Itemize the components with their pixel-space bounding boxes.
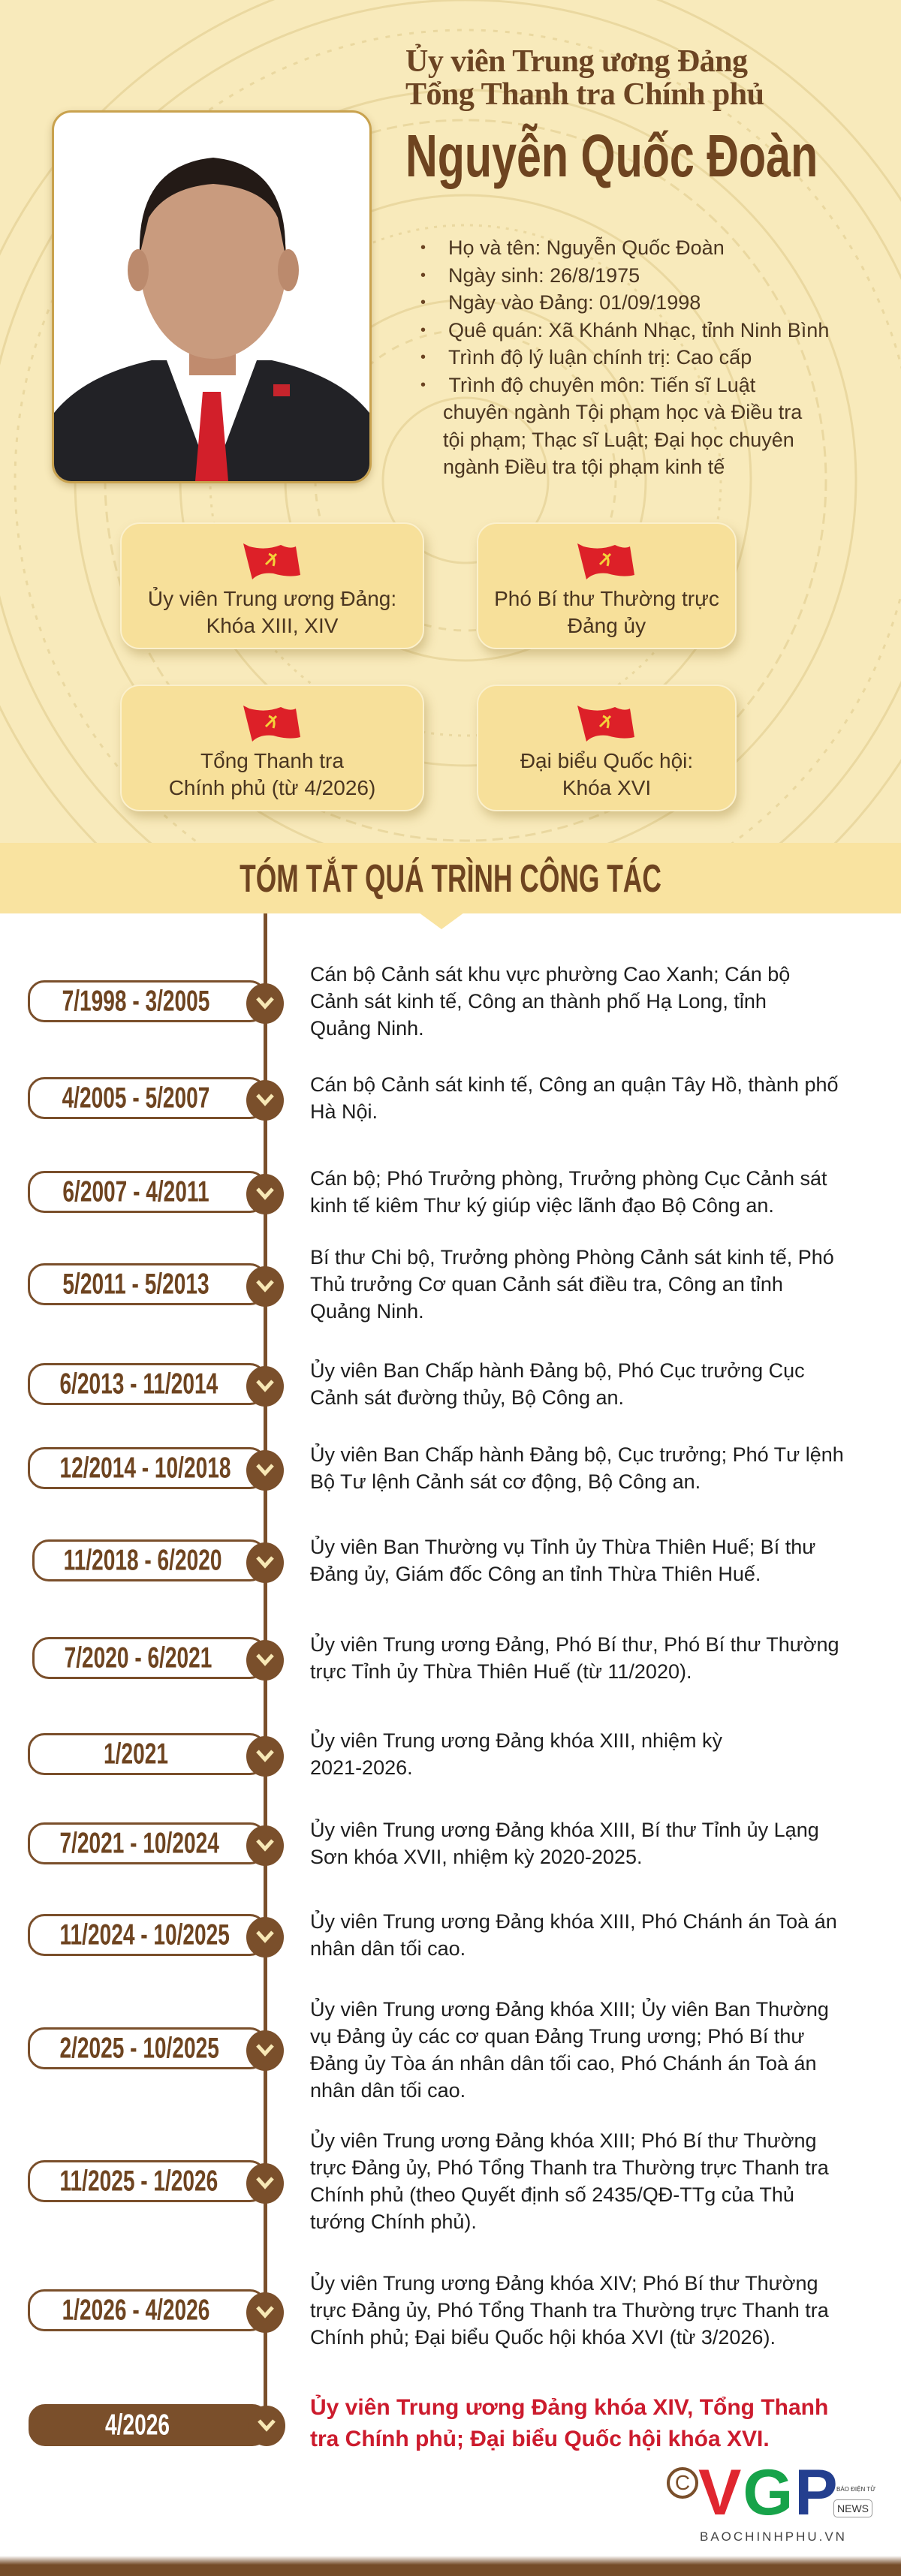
text: Bí thư Chi bộ, Trưởng phòng Phòng Cảnh sát kinh tế, Phó	[310, 1246, 834, 1268]
logo: VGP: C	[675, 2471, 690, 2494]
title: position: Ủy viên Trung ương Đảng	[405, 44, 748, 79]
timeline item 10: Ủy viên Trung ương Đảng khóa XIII, Bí thư Tỉnh ủy Lạng	[310, 1819, 819, 1841]
timeline item 2: Cán bộ Cảnh sát kinh tế, Công an quận Tây Hồ, thành phố	[310, 1073, 838, 1096]
timeline item 8: 7/2020 - 6/2021	[65, 1642, 212, 1674]
timeline item 13	[28, 2129, 829, 2233]
timeline item 8: trực Tỉnh ủy Thừa Thiên Huế (từ 11/2020).	[310, 1660, 692, 1683]
timeline item 7: Đảng ủy, Giám đốc Công an tỉnh Thừa Thiên Huế.	[310, 1563, 761, 1585]
timeline item 4	[28, 1246, 834, 1323]
card: Tong Thanh tra	[120, 685, 424, 811]
title: name: Nguyễn Quốc Đoàn	[405, 122, 818, 189]
title: position: Tổng Thanh tra Chính phủ	[405, 77, 764, 112]
logo: VGP	[667, 2457, 875, 2544]
timeline item 12: vụ Đảng ủy các cơ quan Đảng Trung ương; Phó Bí thư	[310, 2025, 804, 2048]
timeline item 10	[28, 1819, 819, 1868]
personal info list: Trình độ chuyên môn: Tiến sĩ Luật	[449, 374, 755, 396]
text: nhân dân tối cao.	[310, 2079, 466, 2102]
timeline item 5	[28, 1359, 805, 1409]
timeline item 1	[28, 963, 790, 1040]
timeline item 3: kinh tế kiêm Thư ký giúp việc lãnh đạo Bộ Công an.	[310, 1194, 774, 1217]
timeline item 2	[28, 1073, 838, 1123]
timeline item 7: 11/2018 - 6/2020	[64, 1545, 221, 1576]
timeline item 6: Ủy viên Ban Chấp hành Đảng bộ, Cục trưởng; Phó Tư lệnh	[310, 1443, 844, 1466]
timeline item 5: Cảnh sát đường thủy, Bộ Công an.	[310, 1386, 624, 1409]
card: Dai bieu QH: Đại biểu Quốc hội:	[520, 749, 693, 772]
timeline item 5: Ủy viên Ban Chấp hành Đảng bộ, Phó Cục trưởng Cục	[310, 1359, 805, 1382]
timeline item 13: Chính phủ (theo Quyết định số 2435/QĐ-TTg của Thủ	[310, 2183, 794, 2206]
section header band	[0, 843, 901, 913]
personal info list: Họ và tên: Nguyễn Quốc Đoàn	[448, 236, 725, 259]
personal info list: Ngày sinh: 26/8/1975	[448, 264, 640, 287]
personal info list: Quê quán: Xã Khánh Nhạc, tỉnh Ninh Bình	[448, 318, 829, 341]
timeline item 11: nhân dân tối cao.	[310, 1937, 466, 1960]
timeline vertical line	[264, 913, 267, 2407]
timeline item 7: Ủy viên Ban Thường vụ Tỉnh ủy Thừa Thiên Huế; Bí thư	[310, 1536, 815, 1558]
timeline item 15: current	[29, 2394, 828, 2451]
timeline item 12: 2/2025 - 10/2025	[59, 2033, 219, 2064]
card: Pho Bi thu: Phó Bí thư Thường trực	[494, 587, 719, 610]
text: Ủy viên Trung ương Đảng khóa XIV; Phó Bí thư Thường	[310, 2272, 818, 2295]
card: Uy vien TW	[120, 522, 424, 649]
personal info list: chuyên ngành Tội phạm học và Điều tra	[443, 401, 802, 423]
timeline item 8	[32, 1633, 839, 1683]
timeline item 15: current: tra Chính phủ; Đại biểu Quốc hội khóa XVI.	[310, 2427, 770, 2451]
title: position	[405, 44, 764, 112]
personal info list: ngành Điều tra tội phạm kinh tế	[443, 456, 725, 478]
timeline item 15: current: Ủy viên Trung ương Đảng khóa XIV, Tổng Thanh	[310, 2395, 828, 2420]
logo: VGP: BAOCHINHPHU.VN	[700, 2529, 847, 2544]
timeline item 5: 6/2013 - 11/2014	[59, 1368, 218, 1401]
personal info list: Ngày vào Đảng: 01/09/1998	[448, 291, 701, 314]
card: Pho Bi thu: Đảng ủy	[568, 614, 646, 637]
timeline item 3: 6/2007 - 4/2011	[62, 1175, 209, 1208]
timeline item 7	[32, 1536, 815, 1585]
logo: VGP: BÁO ĐIỆN TỬ	[836, 2486, 875, 2493]
timeline item 10: Sơn khóa XVII, nhiệm kỳ 2020-2025.	[310, 1846, 642, 1868]
text: Ủy viên Trung ương Đảng khóa XIII; Phó Bí thư Thường	[310, 2129, 817, 2152]
card: Uy vien TW: Khóa XIII, XIV	[206, 614, 338, 637]
timeline item 13: 11/2025 - 1/2026	[59, 2165, 218, 2198]
timeline item 1: Cảnh sát kinh tế, Công an thành phố Hạ Long, tỉnh	[310, 990, 767, 1013]
timeline item 10: 7/2021 - 10/2024	[59, 1827, 219, 1860]
icon: party flag	[577, 543, 634, 579]
timeline item 9: Ủy viên Trung ương Đảng khóa XIII, nhiệm kỳ	[310, 1729, 722, 1752]
timeline item 3: Cán bộ; Phó Trưởng phòng, Trưởng phòng Cục Cảnh sát	[310, 1167, 827, 1190]
text: tướng Chính phủ).	[310, 2210, 477, 2233]
card: Tong Thanh tra: Chính phủ (từ 4/2026)	[169, 776, 375, 799]
timeline item 2: 4/2005 - 5/2007	[62, 1082, 209, 1114]
personal info list: Trình độ lý luận chính trị: Cao cấp	[448, 346, 752, 369]
timeline item 9: 1/2021	[104, 1738, 168, 1770]
timeline item 11: 11/2024 - 10/2025	[59, 1918, 230, 1952]
text: Cán bộ Cảnh sát khu vực phường Cao Xanh; Cán bộ	[310, 963, 790, 986]
timeline item 9: 2021-2026.	[310, 1756, 413, 1779]
timeline item 14: trực Đảng ủy, Phó Tổng Thanh tra Thường trực Thanh tra	[310, 2299, 829, 2322]
text: Ủy viên Trung ương Đảng khóa XIII; Ủy viên Ban Thường	[310, 1998, 829, 2021]
icon: party flag	[243, 543, 300, 579]
personal info list: tội phạm; Thạc sĩ Luật; Đại học chuyên	[443, 428, 794, 450]
text: Quảng Ninh.	[310, 1300, 424, 1323]
icon: party flag	[577, 706, 634, 742]
heading: TÓM TẮT QUÁ TRÌNH CÔNG TÁC	[240, 857, 661, 901]
timeline item 4: Thủ trưởng Cơ quan Cảnh sát điều tra, Công an tỉnh	[310, 1273, 783, 1296]
portrait photo	[52, 110, 372, 483]
footer band	[0, 2556, 901, 2576]
timeline item 9	[28, 1729, 722, 1779]
card: Pho Bi thu	[477, 522, 737, 649]
timeline item 14: 1/2026 - 4/2026	[62, 2294, 209, 2327]
timeline item 6	[28, 1443, 844, 1493]
logo: VGP: NEWS	[837, 2502, 869, 2514]
timeline item 8: Ủy viên Trung ương Đảng, Phó Bí thư, Phó Bí thư Thường	[310, 1633, 839, 1656]
timeline item 12: Đảng ủy Tòa án nhân dân tối cao, Phó Chánh án Toà án	[310, 2052, 817, 2075]
timeline item 12	[28, 1998, 829, 2102]
timeline item 11	[28, 1910, 837, 1960]
timeline item 2: Hà Nội.	[310, 1100, 378, 1123]
timeline item 6: Bộ Tư lệnh Cảnh sát cơ động, Bộ Công an.	[310, 1470, 701, 1493]
timeline item 3	[28, 1167, 827, 1217]
text: Quảng Ninh.	[310, 1017, 424, 1040]
timeline item 4: 5/2011 - 5/2013	[62, 1268, 209, 1300]
icon: party flag	[243, 706, 300, 742]
timeline item 1: 7/1998 - 3/2005	[62, 985, 209, 1018]
logo: VGP: VGP	[698, 2457, 839, 2529]
text: Chính phủ; Đại biểu Quốc hội khóa XVI (từ 3/2026).	[310, 2326, 776, 2349]
timeline item 13: trực Đảng ủy, Phó Tổng Thanh tra Thường trực Thanh tra	[310, 2156, 829, 2179]
card: Uy vien TW: Ủy viên Trung ương Đảng:	[148, 587, 396, 610]
timeline item 14	[28, 2272, 829, 2349]
timeline item 15: current: 4/2026	[105, 2409, 170, 2441]
card: Dai bieu QH	[477, 685, 737, 811]
card: Tong Thanh tra: Tổng Thanh tra	[200, 749, 344, 772]
top section background	[0, 0, 901, 913]
card: Dai bieu QH: Khóa XVI	[562, 776, 651, 799]
arrow: header pointer	[419, 913, 464, 929]
personal info list	[420, 236, 829, 478]
timeline item 11: Ủy viên Trung ương Đảng khóa XIII, Phó Chánh án Toà án	[310, 1910, 837, 1933]
timeline item 6: 12/2014 - 10/2018	[59, 1452, 231, 1485]
